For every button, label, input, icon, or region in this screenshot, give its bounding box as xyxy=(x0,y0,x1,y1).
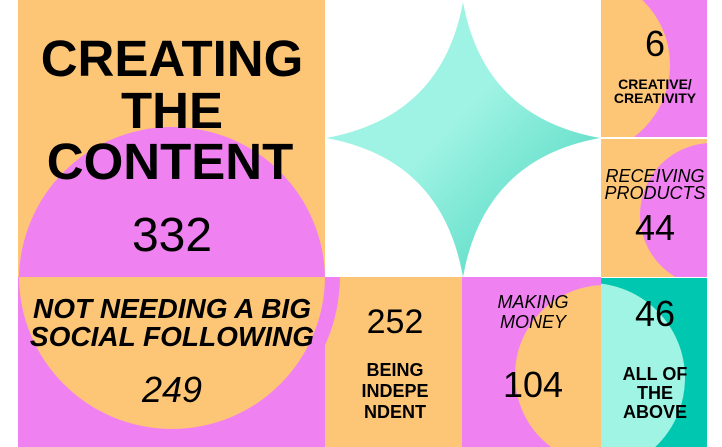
panel: creating the content: CONTENT xyxy=(47,133,293,190)
panel: creative xyxy=(601,0,707,137)
panel: receiving products: RECEIVING xyxy=(605,166,705,186)
panel: creative: 6 xyxy=(645,23,665,64)
icon: teal star xyxy=(326,2,600,277)
panel: creating the content: THE xyxy=(121,82,223,139)
panel: receiving products: PRODUCTS xyxy=(604,183,706,203)
panel: creative: CREATIVE/ xyxy=(618,76,692,92)
panel: all of the above: ABOVE xyxy=(623,402,687,422)
panel: receiving products: 44 xyxy=(635,207,675,248)
panel: being independent: NDENT xyxy=(364,402,426,422)
panel: not needing a big social following: NOT NEEDING A BIG xyxy=(33,293,311,324)
panel: all of the above: ALL OF xyxy=(623,364,687,384)
number 332: 332 xyxy=(132,209,212,262)
panel: all of the above: 46 xyxy=(635,293,675,334)
panel: making money: MONEY xyxy=(500,312,568,332)
panel: making money xyxy=(462,277,601,447)
panel: being independent xyxy=(325,277,462,447)
panel: making money: MAKING xyxy=(497,292,569,312)
panel: creating the content xyxy=(18,0,325,277)
panel: all of the above xyxy=(601,278,707,447)
panel: being independent: 252 xyxy=(367,303,423,341)
panel: all of the above: THE xyxy=(637,383,673,403)
panel: not needing a big social following xyxy=(18,277,325,447)
panel: being independent: INDEPE xyxy=(361,381,429,401)
panel: receiving products xyxy=(601,139,707,277)
panel: being independent: BEING xyxy=(366,360,424,380)
panel: making money: 104 xyxy=(503,364,563,405)
panel: not needing a big social following: 249 xyxy=(141,369,202,410)
panel: not needing a big social following: SOCIAL FOLLOWING xyxy=(30,321,314,352)
title: CREATING xyxy=(41,30,303,87)
panel: creative: CREATIVITY xyxy=(614,90,697,106)
